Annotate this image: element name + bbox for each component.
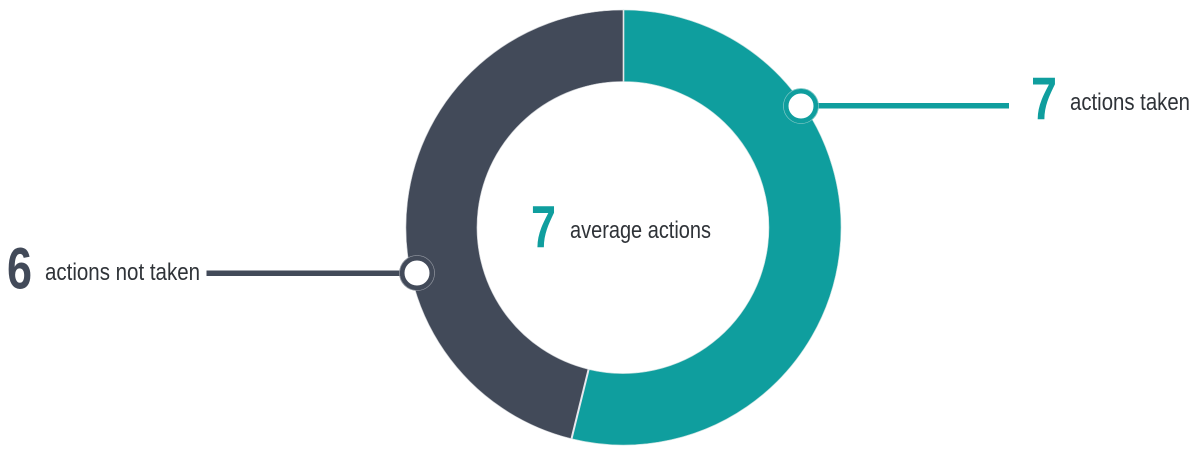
callout: actions not taken	[7, 236, 434, 302]
center label	[531, 194, 711, 260]
segment divider top	[622, 10, 624, 82]
label: actions not taken	[45, 259, 200, 286]
segment divider bottom	[572, 369, 589, 439]
value: 7	[531, 194, 556, 260]
value: 7	[1031, 65, 1057, 132]
segment: actions not taken	[406, 10, 624, 439]
segment: actions taken	[572, 10, 841, 445]
donut chart	[406, 10, 841, 445]
marker	[784, 88, 818, 124]
value: 6	[7, 236, 32, 302]
callout: actions taken	[784, 65, 1190, 132]
leader line	[206, 270, 406, 276]
marker	[400, 256, 434, 290]
label: average actions	[570, 217, 711, 244]
leader line	[805, 103, 1009, 108]
